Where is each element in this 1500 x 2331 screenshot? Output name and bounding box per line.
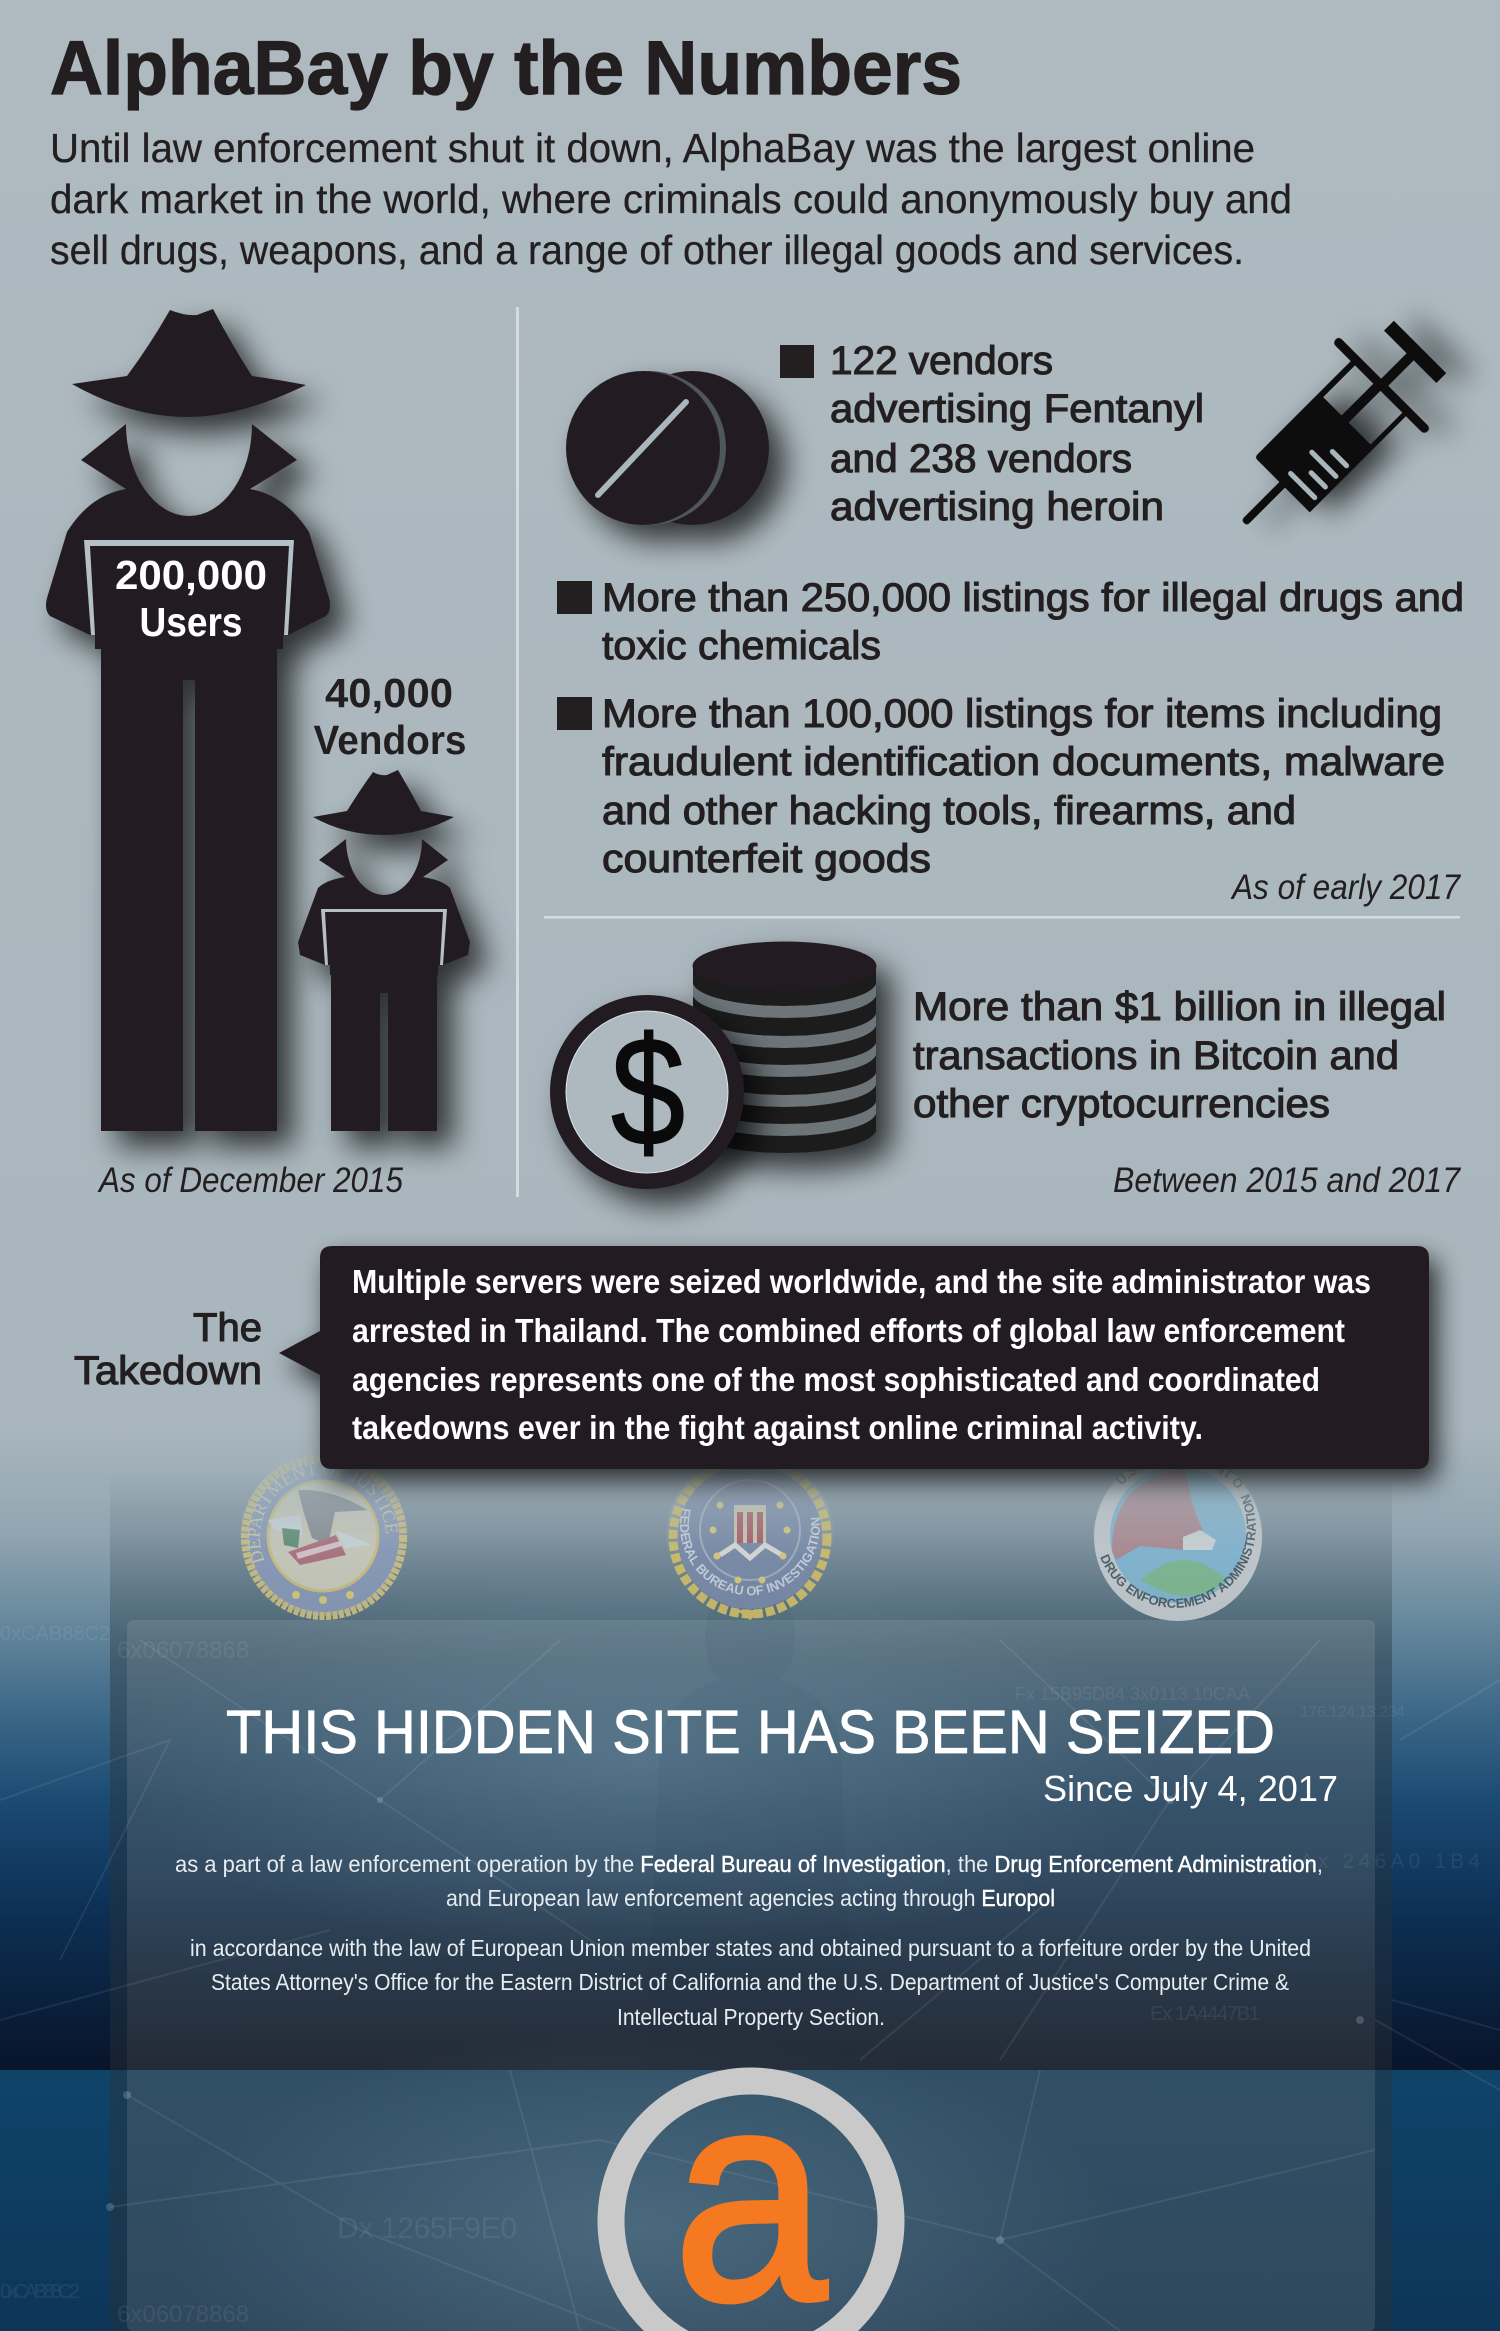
seal fade: DEA — [1093, 1452, 1263, 1622]
background: Ex 1A4447B1 — [1150, 2003, 1260, 2025]
text: cryptocurrency — [913, 985, 1446, 1126]
callout: takedown: takedowns ever in the fight against online criminal activity. — [352, 1409, 1203, 1446]
text: other listings: More than 100,000 listings for items including — [602, 692, 1442, 736]
text: vendors advertising — [830, 339, 1204, 529]
intro text: Until law enforcement shut it down, AlphaBay was the largest online — [50, 125, 1255, 171]
figure: large user silhouette — [46, 309, 330, 1131]
callout: takedown — [279, 1246, 1429, 1469]
bullet: drugs listings — [557, 581, 592, 614]
label: 200,000 users: Users — [140, 599, 242, 645]
seized heading: THIS HIDDEN SITE HAS BEEN SEIZED — [226, 1698, 1275, 1766]
text: vendors advertising: advertising heroin — [830, 485, 1164, 529]
caption: as of December 2015: As of December 2015 — [97, 1161, 403, 1200]
background: 176.124.13.234 — [1300, 1704, 1405, 1721]
intro text: sell drugs, weapons, and a range of other illegal goods and services. — [50, 227, 1244, 273]
logo: AlphaBay — [611, 2028, 891, 2331]
text: drugs listings: toxic chemicals — [602, 624, 881, 668]
seizure notice text: States Attorney's Office for the Eastern District of California and the U.S. Department of Justice's Computer Crime & — [211, 1969, 1289, 1995]
title: AlphaBay by the Numbers — [50, 26, 962, 111]
background: Dx 1265F9E0 — [337, 2212, 517, 2245]
seizure notice text: in accordance with the law of European Union member states and obtained pursuant to a forfeiture order by the United — [190, 1935, 1311, 1961]
figure: small vendor silhouette — [298, 770, 470, 1131]
background: 6x06078868 — [117, 1637, 249, 1664]
callout: takedown: arrested in Thailand. The combined efforts of global law enforcement — [352, 1312, 1345, 1349]
text: drugs listings: More than 250,000 listings for illegal drugs and — [602, 576, 1464, 620]
vertical divider — [516, 307, 519, 1197]
callout: takedown: agencies represents one of the most sophisticated and coordinated — [352, 1361, 1320, 1398]
bullet: other listings — [557, 697, 592, 730]
intro text — [50, 125, 1292, 273]
text: other listings: counterfeit goods — [602, 837, 931, 881]
horizontal divider — [544, 916, 1460, 918]
text: cryptocurrency: More than $1 billion in illegal — [913, 985, 1446, 1029]
label: 200,000 users: 200,000 — [115, 552, 267, 598]
takedown label: Takedown — [74, 1349, 262, 1393]
label: 40,000 vendors — [314, 670, 466, 763]
seal: department of justice — [241, 1454, 407, 1620]
icon: coin stack — [550, 942, 876, 1189]
label: 40,000 vendors: 40,000 — [325, 670, 453, 716]
icon: syringe — [1198, 301, 1466, 569]
seizure notice text: as a part of a law enforcement operation by the Federal Bureau of Investigation, the Drug Enforcement Administration, — [175, 1851, 1323, 1877]
caption: as of early 2017: As of early 2017 — [1230, 868, 1461, 907]
background: 0xCAB88C2 — [0, 1623, 110, 1645]
text: drugs listings — [602, 576, 1464, 668]
seal fade: justice — [240, 1453, 408, 1621]
caption: between 2015 and 2017: Between 2015 and 2017 — [1113, 1161, 1461, 1200]
seal fade: FBI — [666, 1453, 834, 1621]
text: vendors advertising: and 238 vendors — [830, 437, 1132, 481]
text: cryptocurrency: other cryptocurrencies — [913, 1082, 1330, 1126]
background: 0xCAB88C2 — [0, 2281, 80, 2303]
seizure notice text — [175, 1851, 1323, 2030]
seal: FBI — [668, 1469, 832, 1620]
background: Fx 15B95D84 3x0113 10CAA — [1015, 1684, 1250, 1704]
takedown label — [74, 1306, 262, 1393]
icon: pill — [566, 371, 769, 525]
seizure notice text: and European law enforcement agencies acting through Europol — [446, 1885, 1055, 1911]
label: 40,000 vendors: Vendors — [314, 717, 466, 763]
intro text: dark market in the world, where criminals could anonymously buy and — [50, 176, 1292, 222]
text: other listings: fraudulent identification documents, malware — [602, 740, 1445, 784]
takedown label: The — [193, 1306, 262, 1350]
seal: DEA: DRUG ENFORCEMENT ADMINISTRATION — [1100, 1494, 1256, 1608]
text: cryptocurrency: transactions in Bitcoin and — [913, 1034, 1399, 1078]
background: 6x06078868 — [117, 2301, 249, 2328]
seizure notice text: Intellectual Property Section. — [617, 2004, 885, 2030]
seal: DEA: U.S. DEPARTMENT OF JUSTICE — [1116, 1469, 1242, 1488]
icon: coin stack: $ — [611, 1005, 685, 1178]
seized date: Since July 4, 2017 — [1043, 1768, 1338, 1809]
seal: FBI: FEDERAL BUREAU OF INVESTIGATION — [680, 1508, 820, 1596]
label: 200,000 users — [115, 552, 267, 645]
text: vendors advertising: 122 vendors — [830, 339, 1053, 383]
text: vendors advertising: advertising Fentanyl — [830, 387, 1204, 431]
text: other listings: and other hacking tools, firearms, and — [602, 789, 1296, 833]
seal: department of justice: DEPARTMENT OF JUSTICE — [248, 1462, 398, 1564]
background: Ax 246A0 1B4 — [1300, 1850, 1480, 1873]
text: other listings — [602, 692, 1445, 881]
callout: takedown: Multiple servers were seized worldwide, and the site administrator was — [352, 1263, 1371, 1300]
bullet: vendors — [780, 345, 814, 378]
